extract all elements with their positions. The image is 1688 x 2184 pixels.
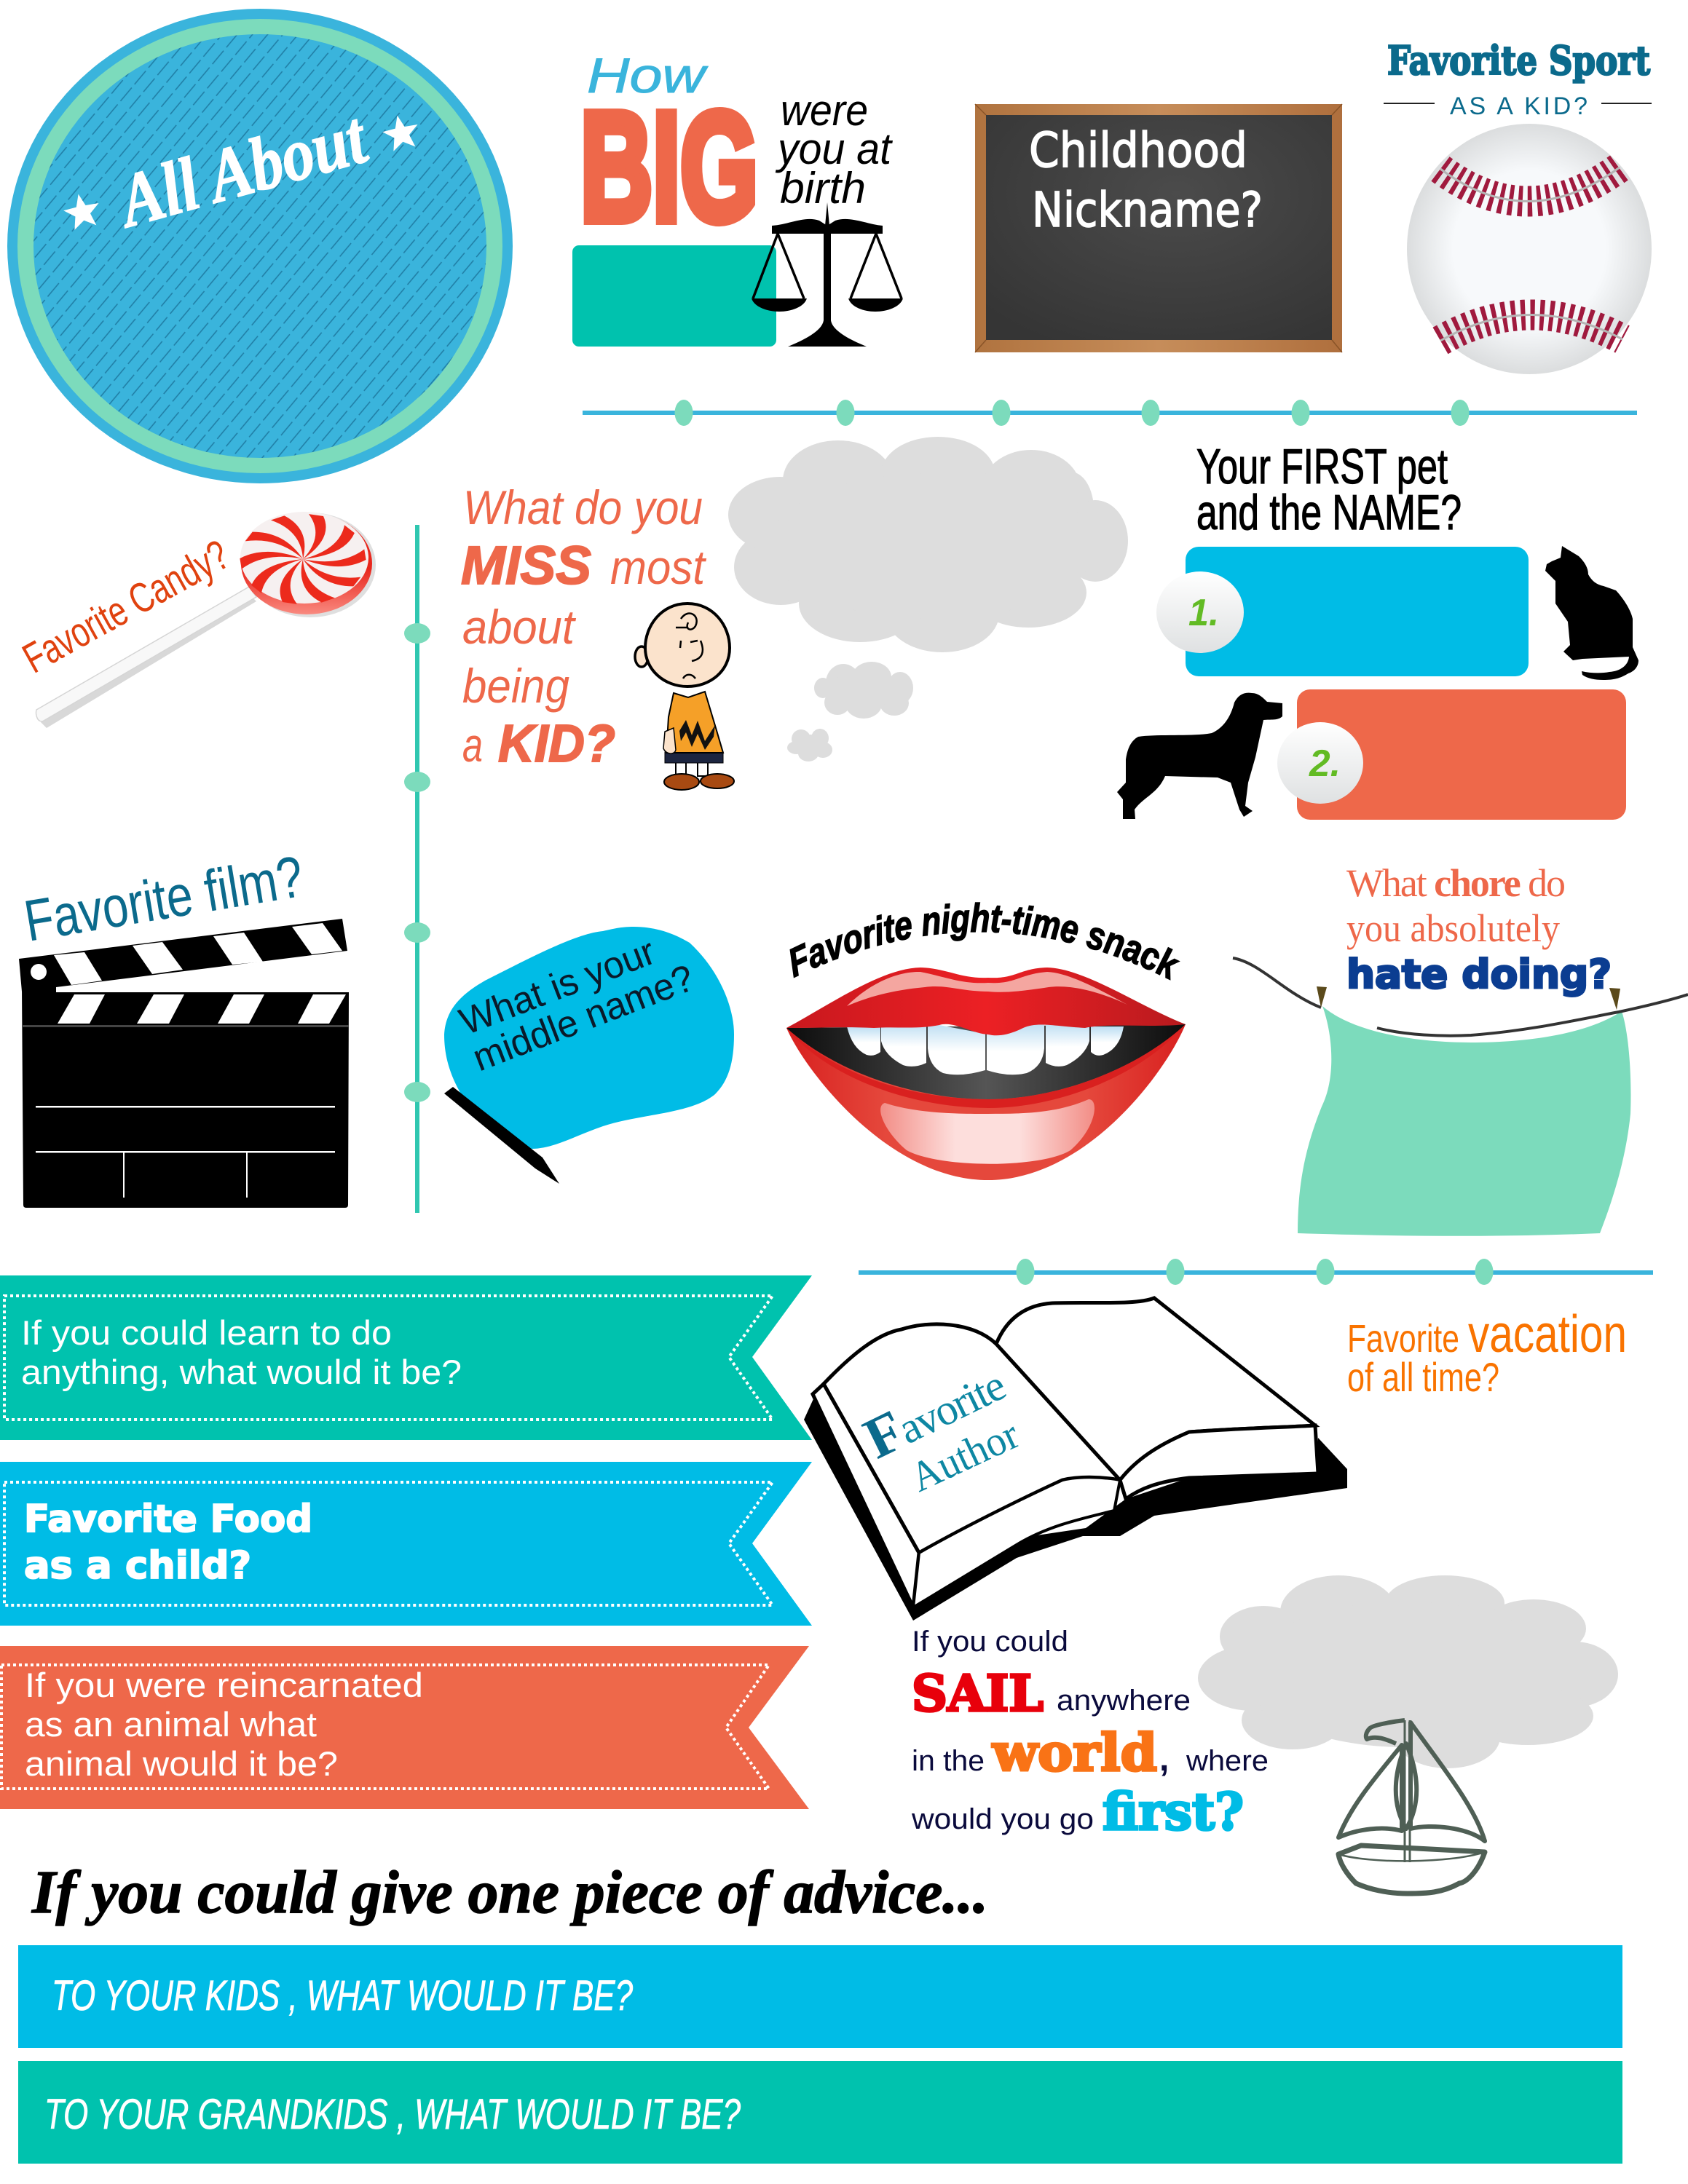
text: What is your middle name?: middle name? — [468, 957, 700, 1080]
speech blob — [444, 927, 734, 1149]
ribbon banner: reincarnated — [0, 1646, 809, 1809]
text: favorite food — [24, 1497, 312, 1588]
text: What is your middle name?: What is your — [454, 930, 661, 1043]
answer box: pet one — [1186, 547, 1529, 676]
text: miss question: What do you — [463, 480, 703, 534]
text: sail anywhere question: where — [1186, 1745, 1269, 1777]
thought cloud: small — [787, 729, 832, 761]
text: learn anything — [21, 1313, 462, 1391]
text: favorite vacation — [1347, 1305, 1627, 1400]
heading: All About: All About — [107, 95, 376, 245]
icon: left star — [60, 190, 103, 232]
text: learn anything: If you could learn to do — [21, 1313, 392, 1352]
text: reincarnated: as an animal what — [25, 1705, 317, 1744]
text: chore question: hate doing? — [1346, 951, 1612, 997]
icon: right star — [379, 111, 422, 153]
icon: open book — [804, 1298, 1347, 1621]
text: Nickname?: Nickname? — [1032, 182, 1263, 238]
text: curved snack caption: Favorite night-time snack — [789, 902, 1180, 981]
text: favorite food: Favorite Food — [24, 1497, 312, 1541]
text: Favorite Candy?: Favorite Candy? — [15, 531, 237, 682]
panel: favorite film — [19, 844, 349, 1208]
text: were you at birth: were — [781, 86, 868, 135]
text: to your kids: TO YOUR KIDS , WHAT WOULD IT BE? — [52, 1972, 634, 2019]
text: sail anywhere question: anywhere — [1057, 1685, 1191, 1717]
text: miss question: KID? — [498, 715, 615, 773]
text: chore question: you absolutely — [1346, 906, 1560, 950]
icon: hanging cloth — [1298, 1006, 1631, 1236]
answer box: teal — [572, 245, 776, 347]
icon: baseball — [1407, 124, 1652, 374]
icon: clapperboard — [19, 919, 349, 1208]
answer box: pet two — [1297, 689, 1626, 820]
icon: pen — [444, 1087, 559, 1184]
answer bar: to your grandkids — [18, 2061, 1622, 2164]
text: reincarnated: animal would it be? — [25, 1744, 338, 1783]
text: chore question — [1346, 861, 1612, 997]
text: favorite vacation: of all time? — [1347, 1354, 1499, 1400]
heading: first pet: Your FIRST pet — [1196, 439, 1448, 494]
badge: number 2: 2. — [1309, 743, 1341, 785]
clothesline — [1233, 958, 1688, 1036]
text: sail anywhere question: world — [992, 1722, 1157, 1783]
ribbon banner: favorite food — [0, 1462, 812, 1626]
text: learn anything: anything, what would it be? — [21, 1353, 462, 1391]
timeline: vertical — [404, 525, 430, 1213]
timeline: upper horizontal — [583, 400, 1637, 426]
heading: first pet — [1196, 439, 1462, 540]
icon: dog silhouette — [1117, 693, 1282, 819]
text: favorite vacation: Favorite — [1347, 1317, 1459, 1361]
panel: middle name — [444, 927, 734, 1184]
text: sail anywhere question: SAIL — [912, 1665, 1044, 1723]
text: miss question: about — [462, 600, 576, 654]
text: were you at birth — [775, 86, 893, 213]
text: sail anywhere question: If you could — [912, 1626, 1068, 1658]
panel: favorite author book — [804, 1298, 1347, 1621]
panel: favorite candy — [15, 512, 376, 728]
text: Favorite film?: Favorite film? — [20, 844, 308, 954]
panel: what do you miss most about being a kid — [461, 480, 734, 790]
badge: number 1: 1. — [1188, 592, 1219, 634]
icon: cartoon boy — [635, 604, 734, 790]
text: miss question: MISS — [461, 535, 591, 596]
text: Childhood: Childhood — [1029, 122, 1247, 178]
panel: childhood nickname chalkboard — [975, 104, 1342, 352]
heading: How: How — [587, 48, 709, 103]
text: sail anywhere question: in the — [912, 1745, 985, 1777]
text: miss question: most — [610, 540, 706, 594]
cloud: sailing — [1198, 1575, 1618, 1768]
clothes pins — [1317, 986, 1620, 1010]
text: sail anywhere question: , — [1159, 1740, 1169, 1779]
text: were you at birth: you at — [775, 124, 893, 173]
heading: one piece of advice: If you could give one piece of advice... — [31, 1859, 988, 1926]
text: Favorite Author — [854, 1350, 1026, 1501]
badge: number 2 — [1277, 722, 1363, 804]
icon: lips — [786, 968, 1186, 1180]
panel: favorite sport baseball — [1384, 37, 1652, 374]
text: chore question: What chore do — [1346, 861, 1566, 905]
text: sail anywhere question: would you go — [911, 1803, 1094, 1835]
subheading: AS A KID?: AS A KID? — [1450, 92, 1588, 120]
heading: first pet: and the NAME? — [1196, 485, 1462, 540]
text: Favorite Author: Author — [903, 1410, 1026, 1501]
text: favorite vacation: vacation — [1468, 1305, 1627, 1364]
panel: first pet and name — [1117, 439, 1638, 820]
icon: lollipop — [36, 512, 376, 728]
panel: chore you hate — [1233, 861, 1688, 1236]
timeline: lower horizontal — [859, 1259, 1653, 1285]
text: miss question: being — [462, 659, 569, 713]
heading: BIG: BIG — [580, 80, 758, 253]
ribbon banner: learn anything — [0, 1275, 812, 1440]
icon: cat silhouette — [1545, 546, 1638, 680]
panel: favorite night-time snack — [786, 902, 1186, 1180]
text: reincarnated — [25, 1666, 423, 1783]
text: sail anywhere question: first? — [1103, 1781, 1244, 1842]
text: reincarnated: If you were reincarnated — [25, 1666, 423, 1704]
text: favorite food: as a child? — [24, 1544, 251, 1588]
text: miss question — [461, 480, 706, 773]
icon: sailboat — [1338, 1720, 1485, 1894]
text: miss question: a — [462, 718, 483, 772]
badge: number 1 — [1156, 571, 1244, 653]
panel: All About circle badge — [7, 9, 513, 483]
thought cloud: large — [728, 437, 1128, 652]
text: sail anywhere question — [911, 1626, 1269, 1842]
text: to your grandkids: TO YOUR GRANDKIDS , WHAT WOULD IT BE? — [44, 2091, 741, 2138]
text: were you at birth: birth — [780, 164, 866, 213]
thought cloud: medium — [814, 662, 913, 719]
icon: balance scales — [752, 202, 903, 347]
text: Favorite Author: Favorite — [854, 1350, 1014, 1471]
answer bar: to your kids — [18, 1945, 1622, 2048]
panel: how big were you at birth — [572, 48, 903, 347]
